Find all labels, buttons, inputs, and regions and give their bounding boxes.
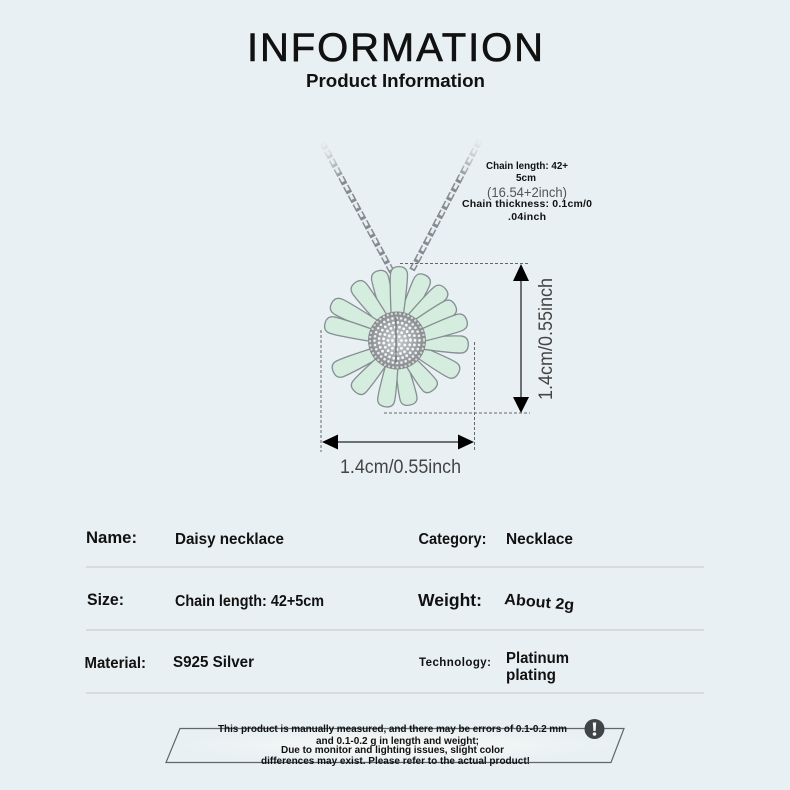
disclaimer text: This product is manually measured, and there may be errors of 0.1-0.2 mm [218,724,567,735]
necklace illustration [322,140,480,408]
chain specification text: Chain thickness: 0.1cm/0 [462,198,592,210]
disclaimer text: and 0.1-0.2 g in length and weight; [316,736,479,747]
chain specification text: 5cm [516,173,536,184]
icon: warning [584,719,604,739]
row: size and weight: About 2g [504,591,575,614]
disclaimer text [218,724,567,767]
disclaimer text: differences may exist. Please refer to the actual product! [261,756,530,767]
disclaimer box [166,728,624,762]
chain [322,140,480,272]
row: size and weight [87,590,575,614]
row: material and technology: S925 Silver [173,654,254,671]
row: name and category: Name: [86,528,137,547]
row: name and category: Daisy necklace [175,531,284,548]
row: size and weight: Weight: [418,590,482,610]
width dimension: 1.4cm/0.55inch [340,457,461,478]
row: material and technology [84,650,569,684]
row: material and technology: Platinum [506,650,569,667]
subtitle: Product Information [306,71,485,91]
row: material and technology: Material: [84,655,146,672]
row: name and category: Category: [418,531,486,548]
daisy petals [323,266,469,408]
row: name and category: Necklace [506,531,573,548]
title: INFORMATION [247,26,543,70]
row: size and weight: Size: [87,590,124,609]
width dimension [321,330,474,478]
daisy center [368,312,426,370]
height dimension: 1.4cm/0.55inch [536,278,557,400]
disclaimer text: Due to monitor and lighting issues, slight color [281,745,504,756]
spec table [84,528,575,684]
row: name and category [86,528,573,548]
height dimension [384,264,557,413]
row: material and technology: plating [506,667,556,684]
row: material and technology: Technology: [419,657,491,669]
chain specification text: .04inch [508,211,546,223]
table dividers [86,567,704,693]
row: size and weight: Chain length: 42+5cm [175,593,324,610]
chain specification text: (16.54+2inch) [487,185,567,200]
chain specification text [462,161,592,223]
chain specification text: Chain length: 42+ [486,161,568,172]
